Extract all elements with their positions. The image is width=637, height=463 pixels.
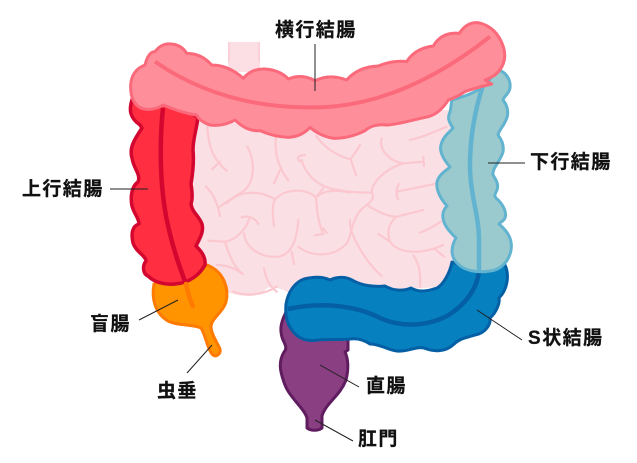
label: cecum <box>90 300 178 335</box>
label: sigmoid colon: S 状結腸 <box>528 327 603 349</box>
label: ascending colon: 上行結腸 <box>22 178 104 200</box>
descending colon <box>437 70 511 272</box>
label: rectum <box>320 365 407 397</box>
label: ascending colon <box>22 178 148 200</box>
label: sigmoid colon <box>477 310 603 349</box>
label: anus <box>315 420 399 450</box>
label: descending colon <box>488 151 612 173</box>
label: transverse colon: 横行結腸 <box>275 19 357 41</box>
label: cecum: 盲腸 <box>90 313 131 335</box>
sigmoid colon <box>286 262 507 351</box>
label: rectum: 直腸 <box>366 375 407 397</box>
rectum <box>280 312 348 430</box>
cecum <box>153 265 227 356</box>
ascending colon <box>130 97 205 284</box>
transverse colon <box>131 23 505 138</box>
label: transverse colon <box>275 19 357 91</box>
label: descending colon: 下行結腸 <box>530 151 612 173</box>
label: appendix: 虫垂 <box>157 380 198 402</box>
cecum overlap line <box>186 284 193 306</box>
label: anus: 肛門 <box>358 428 399 450</box>
small intestine <box>185 42 456 296</box>
label: appendix <box>157 345 212 402</box>
